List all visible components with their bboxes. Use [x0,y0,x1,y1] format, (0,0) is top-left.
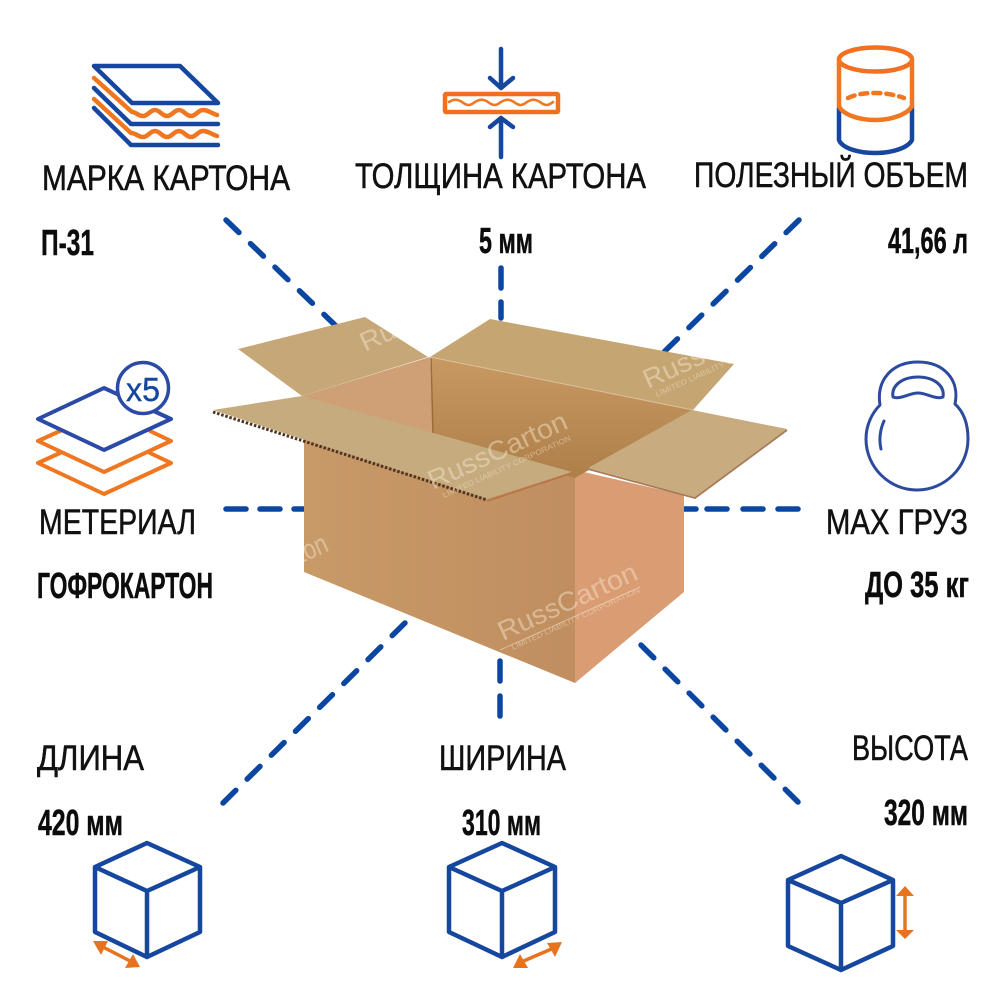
icon: sheets x5: x5 [126,371,160,408]
icon: thickness [445,49,558,157]
watermark: front flap: RussCarton [423,406,572,495]
dashed connector lines [223,220,799,803]
heading: высота: ВЫСОТА [852,728,968,768]
panel: высота [788,728,968,970]
heading: мах груз: МАХ ГРУЗ [826,502,968,542]
right flap [588,410,787,497]
box interior left wall [302,357,433,440]
watermark: corner: RussCarton [493,557,642,646]
back left flap [238,317,428,396]
heading: толщина картона: ТОЛЩИНА КАРТОНА [355,156,646,196]
value: гофрокартон: ГОФРОКАРТОН [37,565,213,606]
watermark: back flap: RussCarton [638,305,787,394]
icon: cylinder [839,48,912,153]
back right flap [430,319,734,410]
panel: ширина [439,738,566,968]
heading: марка картона: МАРКА КАРТОНА [42,158,290,198]
icon: sheets x5 [38,362,171,494]
watermark: corner: LIMITED LIABILITY CORPORATION [510,586,641,652]
icon: kettlebell [866,362,968,490]
icon: layered sheets [94,66,218,145]
panel: макс груз [826,362,969,605]
watermark: back flap [642,356,730,397]
watermark: left flap: RussCarton [355,268,504,357]
panel: длина [37,738,200,968]
front flap [213,396,572,499]
heading: метериал: МЕТЕРИАЛ [39,502,196,542]
icon: cube with length arrow [93,843,200,968]
value: 420 мм: 420 мм [38,802,123,843]
panel: толщина картона [355,49,646,261]
panel: полезный объем [694,48,968,261]
watermark: main: RussCarton [212,528,332,604]
box right face [575,470,684,683]
heading: длина: ДЛИНА [37,738,144,778]
panel: марка картона [41,66,290,263]
panel: материал [37,362,213,606]
corrugated edge of front flap [213,412,487,500]
heading: ширина: ШИРИНА [439,738,566,778]
cardboard box [212,317,788,683]
icon: cube with width arrow [449,843,562,968]
box interior back wall [431,357,693,478]
value: 310 мм: 310 мм [462,802,541,843]
value: 5 мм: 5 мм [479,220,533,261]
value: П-31: П-31 [41,222,94,263]
box front face [304,430,575,683]
watermark: back flap: LIMITED LIABILITY CORPORATION [654,333,785,399]
watermark: front flap: LIMITED LIABILITY CORPORATION [441,434,572,500]
icon: cube with height arrow [788,856,914,970]
